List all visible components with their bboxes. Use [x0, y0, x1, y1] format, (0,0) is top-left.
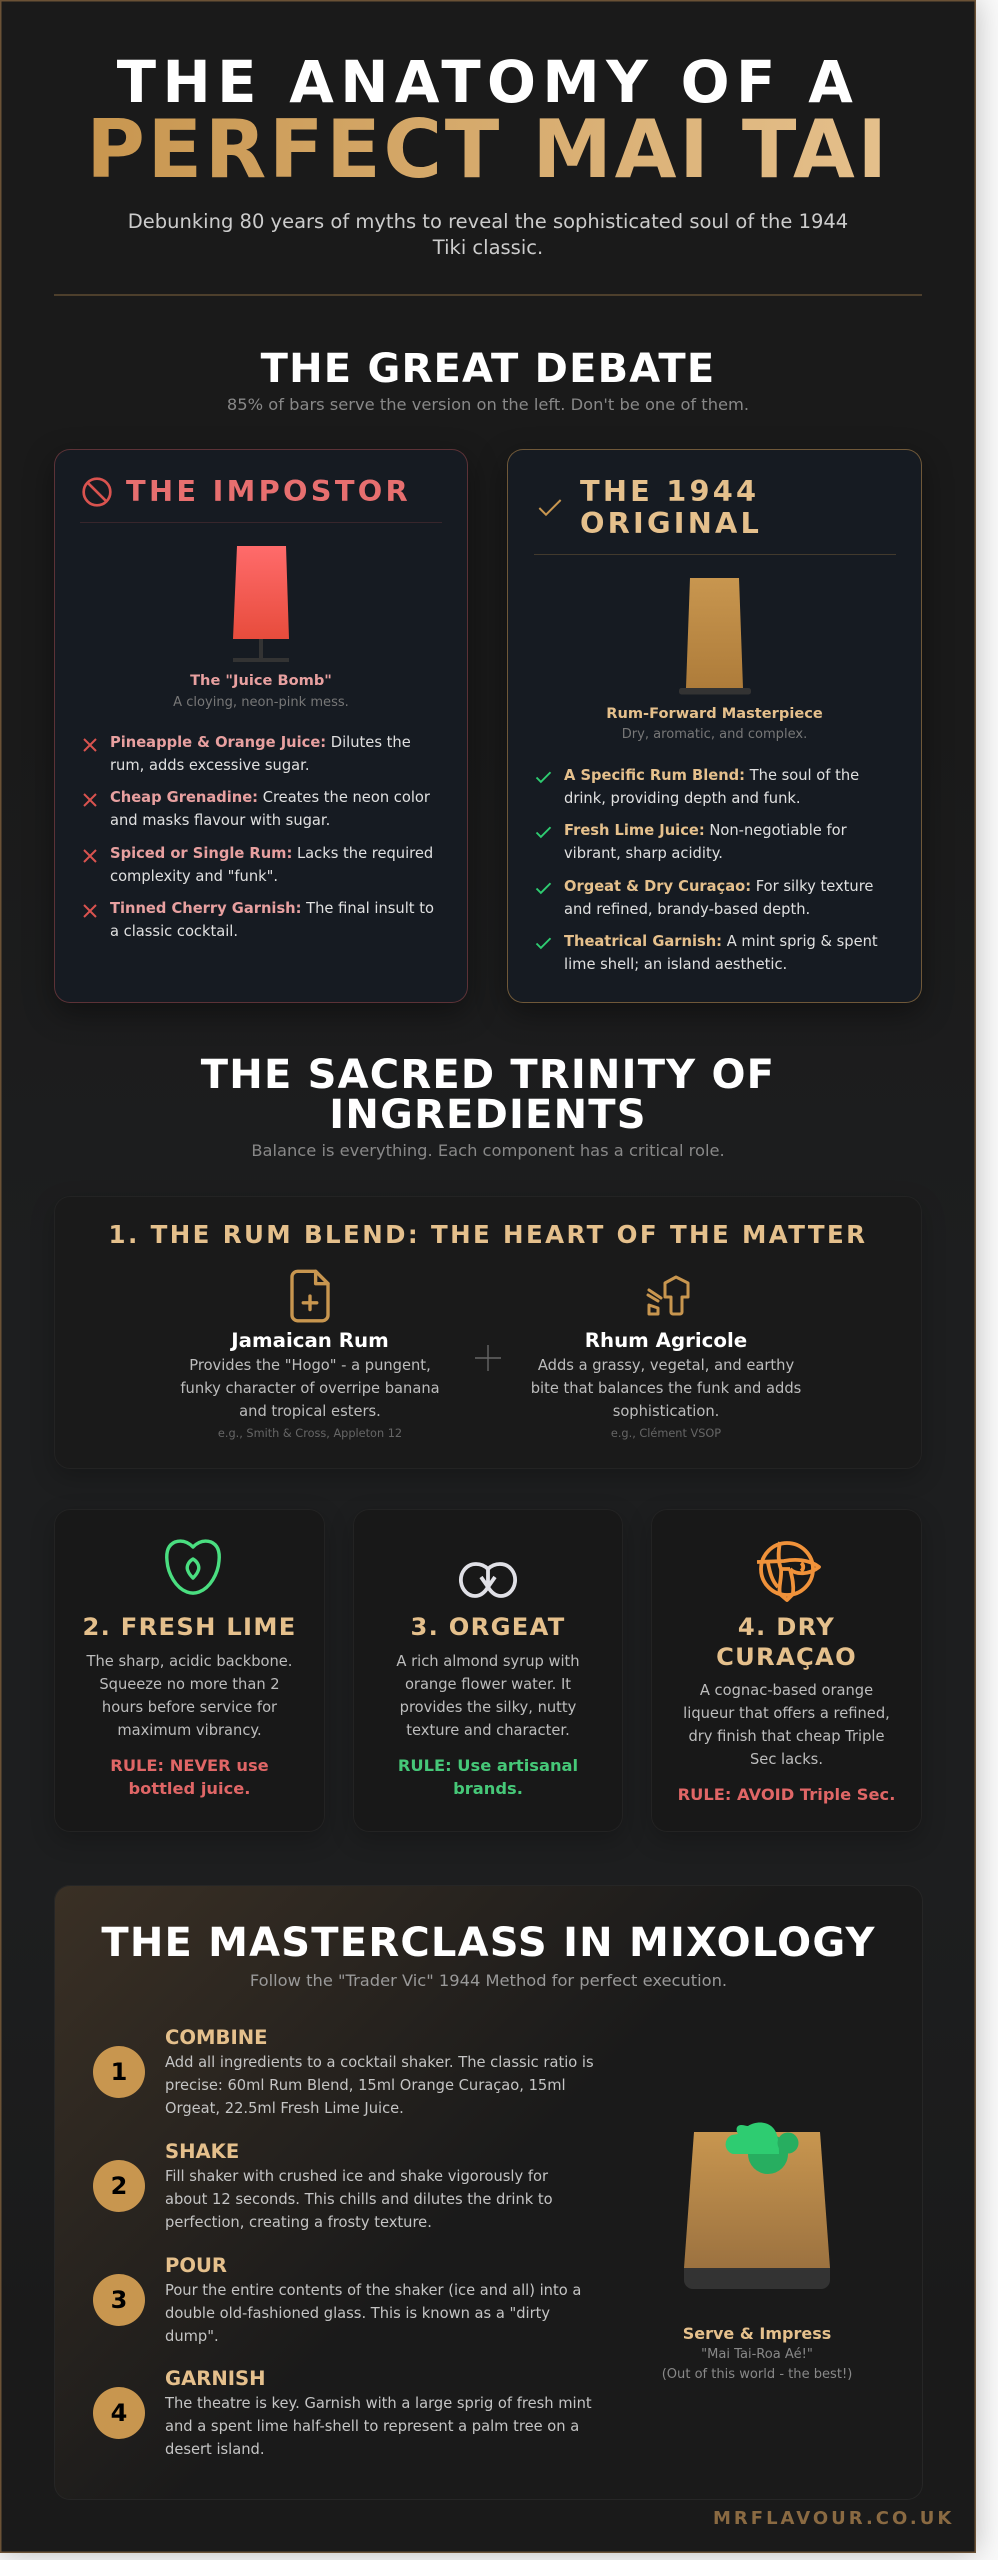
jamaican rum examples: e.g., Smith & Cross, Appleton 12	[218, 1427, 402, 1440]
list: original virtues	[536, 767, 878, 973]
lime description: hours before service for	[102, 1698, 277, 1716]
panel: orgeat	[353, 1509, 623, 1832]
step number 4: 4	[111, 2399, 127, 2427]
lime description	[86, 1652, 292, 1738]
icon: sugarcane axe	[646, 1276, 690, 1316]
virtue 1	[564, 767, 859, 807]
lime rule: bottled juice.	[128, 1779, 250, 1798]
step 3 text: dump".	[165, 2328, 219, 2345]
curacao heading	[651, 1612, 922, 1672]
orgeat description: texture and character.	[406, 1722, 570, 1738]
flaw 2: and masks flavour with sugar.	[110, 812, 330, 829]
icon: plus	[475, 1345, 501, 1371]
original divider	[534, 554, 896, 555]
rum blend heading: 1. THE RUM BLEND: THE HEART OF THE MATTER	[109, 1220, 867, 1249]
orgeat description: orange flower water. It	[405, 1676, 571, 1692]
icon: original glass	[679, 578, 751, 694]
lime rule	[110, 1756, 269, 1798]
icon: check 3	[536, 882, 552, 894]
heading: the great debate: THE GREAT DEBATE	[261, 346, 715, 392]
original heading	[580, 474, 762, 540]
jamaican rum description: and tropical esters.	[239, 1403, 381, 1420]
masterclass heading: THE MASTERCLASS IN MIXOLOGY	[101, 1920, 876, 1966]
rhum agricole name: Rhum Agricole	[585, 1329, 747, 1352]
icon: x 1	[83, 738, 97, 752]
heading: the sacred trinity of ingredients: THE SACRED TRINITY OF	[201, 1052, 775, 1098]
step 1 heading: COMBINE	[165, 2026, 268, 2049]
icon: check	[538, 499, 562, 516]
icon: x 2	[83, 793, 97, 807]
flaw 1: rum, adds excessive sugar.	[110, 757, 310, 774]
icon: check 2	[536, 826, 552, 838]
step 4 text	[165, 2392, 592, 2461]
juice bomb caption: A cloying, neon-pink mess.	[173, 694, 349, 710]
orgeat rule: brands.	[453, 1779, 523, 1798]
virtue 1: A Specific Rum Blend: The soul of the	[564, 767, 859, 784]
title: the anatomy of a: THE ANATOMY OF A	[117, 49, 859, 116]
step number 3	[93, 2274, 145, 2326]
flaw 4: a classic cocktail.	[110, 923, 238, 940]
orgeat description	[396, 1652, 580, 1738]
step 3 heading: POUR	[165, 2254, 227, 2277]
serve heading: Serve & Impress	[683, 2324, 831, 2343]
juice bomb label: The "Juice Bomb"	[190, 672, 332, 689]
step 3 text	[165, 2279, 581, 2348]
serve and impress caption	[654, 2323, 860, 2385]
step 3 text: double old-fashioned glass. This is known as a "dirty	[165, 2305, 550, 2322]
icon: check 1	[536, 772, 552, 784]
masterclass subheading: Follow the "Trader Vic" 1944 Method for perfect execution.	[250, 1971, 727, 1990]
flaw 3: complexity and "funk".	[110, 868, 278, 885]
step 2 text: perfection, creating a frosty texture.	[165, 2214, 432, 2231]
step 4 text: The theatre is key. Garnish with a large sprig of fresh mint	[165, 2395, 592, 2412]
jamaican rum description: funky character of overripe banana	[180, 1380, 440, 1397]
jamaican rum description	[180, 1357, 440, 1420]
virtue 2: vibrant, sharp acidity.	[564, 845, 723, 862]
orgeat rule	[398, 1756, 578, 1798]
flaw 3: Spiced or Single Rum: Lacks the required	[110, 845, 433, 862]
impostor heading: THE IMPOSTOR	[126, 474, 411, 508]
header divider	[54, 294, 922, 296]
virtue 3	[564, 878, 873, 918]
rhum agricole examples: e.g., Clément VSOP	[611, 1427, 721, 1440]
lime heading: 2. FRESH LIME	[82, 1613, 297, 1641]
lime rule: RULE: NEVER use	[110, 1756, 269, 1775]
curacao rule: RULE: AVOID Triple Sec.	[678, 1785, 895, 1804]
virtue 2	[564, 822, 847, 862]
flaw 3	[110, 845, 433, 885]
curacao description: A cognac-based orange	[700, 1682, 873, 1698]
curacao heading: CURAÇAO	[716, 1643, 857, 1671]
rhum agricole description: Adds a grassy, vegetal, and earthy	[538, 1357, 794, 1374]
curacao description: liqueur that offers a refined,	[683, 1704, 890, 1722]
jamaican rum name: Jamaican Rum	[231, 1329, 389, 1352]
step 2 text: Fill shaker with crushed ice and shake vigorously for	[165, 2168, 548, 2185]
heading: the sacred trinity of ingredients: INGREDIENTS	[329, 1092, 647, 1138]
column: jamaican rum	[180, 1329, 440, 1440]
icon: orange	[756, 1541, 821, 1602]
flaw 2: Cheap Grenadine: Creates the neon color	[110, 789, 430, 806]
subtitle: Debunking 80 years of myths to reveal the sophisticated soul of the 1944	[128, 210, 848, 233]
icon: file plus	[290, 1270, 330, 1322]
rhum agricole description	[531, 1357, 801, 1420]
step 4	[93, 2366, 653, 2456]
step 1 text: Orgeat, 22.5ml Fresh Lime Juice.	[165, 2100, 404, 2117]
lime description: Squeeze no more than 2	[99, 1676, 280, 1692]
original heading: THE 1944	[580, 474, 759, 508]
impostor divider	[80, 522, 442, 523]
flaw 1: Pineapple & Orange Juice: Dilutes the	[110, 734, 411, 751]
virtue 3: Orgeat & Dry Curaçao: For silky texture	[564, 878, 873, 895]
step number 2	[93, 2160, 145, 2212]
panel: the impostor	[54, 449, 468, 1003]
flaw 1	[110, 734, 411, 774]
flaw 4: Tinned Cherry Garnish: The final insult to	[110, 900, 434, 917]
step number 1: 1	[111, 2058, 127, 2086]
column: rhum agricole	[531, 1329, 801, 1440]
step 3	[93, 2253, 653, 2343]
step 1	[93, 2025, 653, 2115]
panel: the rum blend	[54, 1196, 922, 1469]
step 1 text: Add all ingredients to a cocktail shaker. The classic ratio is	[165, 2054, 594, 2071]
lime description: maximum vibrancy.	[117, 1722, 262, 1738]
icon: almonds	[459, 1562, 517, 1598]
original heading: ORIGINAL	[580, 506, 762, 540]
orgeat description: A rich almond syrup with	[396, 1652, 580, 1670]
step 2	[93, 2139, 653, 2229]
step 2 heading: SHAKE	[165, 2140, 239, 2163]
step number 2: 2	[111, 2172, 127, 2200]
serve quote: (Out of this world - the best!)	[662, 2367, 852, 2382]
virtue 3: and refined, brandy-based depth.	[564, 901, 810, 918]
virtue 4: Theatrical Garnish: A mint sprig & spent	[564, 933, 878, 950]
panel: fresh lime	[54, 1509, 325, 1832]
jamaican rum description: Provides the "Hogo" - a pungent,	[189, 1357, 431, 1374]
debate subheading: 85% of bars serve the version on the left. Don't be one of them.	[227, 395, 749, 414]
list: impostor flaws	[83, 734, 434, 940]
curacao description: dry finish that cheap Triple	[688, 1728, 885, 1744]
icon: x 3	[83, 849, 97, 863]
curacao description	[651, 1678, 922, 1770]
curacao description: Sec lacks.	[750, 1750, 823, 1768]
icon: juice bomb glass	[233, 546, 289, 662]
masterpiece label: Rum-Forward Masterpiece	[606, 704, 823, 722]
footer brand: MRFLAVOUR.CO.UK	[713, 2508, 954, 2529]
lime description: The sharp, acidic backbone.	[87, 1652, 292, 1670]
virtue 4	[564, 933, 878, 973]
serve quote: "Mai Tai-Roa Aé!"	[701, 2347, 813, 2362]
icon: check 4	[536, 938, 552, 950]
flaw 4	[110, 900, 434, 940]
subtitle	[128, 210, 848, 259]
heading: the sacred trinity of ingredients	[200, 1052, 775, 1138]
virtue 1: drink, providing depth and funk.	[564, 790, 801, 807]
step number 1	[93, 2046, 145, 2098]
orgeat description: provides the silky, nutty	[400, 1698, 576, 1716]
flaw 2	[110, 789, 430, 829]
virtue 4: lime shell; an island aesthetic.	[564, 956, 787, 973]
title: perfect mai tai: PERFECT MAI TAI	[86, 103, 890, 196]
panel: masterclass	[54, 1885, 923, 2500]
serve quote	[654, 2345, 860, 2385]
panel: the 1944 original	[507, 449, 922, 1003]
step number 3: 3	[111, 2286, 127, 2314]
masterpiece caption: Dry, aromatic, and complex.	[622, 726, 807, 742]
rhum agricole description: bite that balances the funk and adds	[531, 1380, 801, 1397]
curacao heading: 4. DRY	[738, 1613, 835, 1641]
step 2 text	[165, 2165, 553, 2234]
orgeat rule: RULE: Use artisanal	[398, 1756, 578, 1775]
step 1 text	[165, 2051, 594, 2120]
step 4 text: and a spent lime half-shell to represent a palm tree on a	[165, 2418, 579, 2435]
icon: lime	[165, 1539, 221, 1595]
virtue 2: Fresh Lime Juice: Non-negotiable for	[564, 822, 847, 839]
step 4 heading: GARNISH	[165, 2367, 266, 2390]
step 4 text: desert island.	[165, 2441, 265, 2458]
subtitle: Tiki classic.	[433, 236, 543, 259]
rhum agricole description: sophistication.	[613, 1403, 719, 1420]
step 3 text: Pour the entire contents of the shaker (ice and all) into a	[165, 2282, 581, 2299]
step number 4	[93, 2387, 145, 2439]
icon: finished mai tai	[684, 2122, 830, 2289]
step 2 text: about 12 seconds. This chills and dilutes the drink to	[165, 2191, 553, 2208]
step 1 text: precise: 60ml Rum Blend, 15ml Orange Curaçao, 15ml	[165, 2077, 566, 2094]
orgeat heading: 3. ORGEAT	[410, 1613, 566, 1641]
panel: dry curacao	[651, 1509, 922, 1832]
trinity subheading: Balance is everything. Each component has a critical role.	[251, 1141, 725, 1160]
icon: x 4	[83, 904, 97, 918]
icon: ban	[82, 477, 112, 507]
